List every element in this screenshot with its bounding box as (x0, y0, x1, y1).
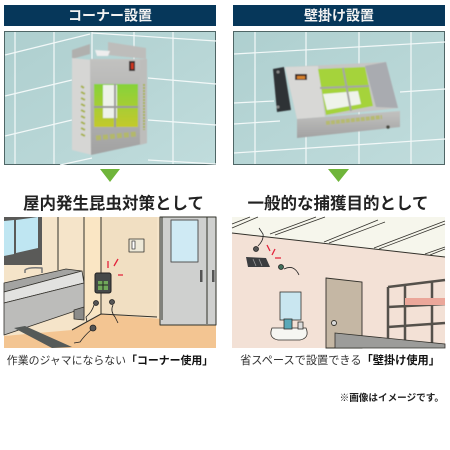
photo: device mounted in a tiled corner (4, 32, 216, 165)
door (160, 217, 216, 325)
caption: right: 省スペースで設置できる「壁掛け使用」 (240, 353, 440, 367)
heading: general capture: 一般的な捕獲目的として (247, 193, 429, 213)
illustration: kitchen corner use (4, 217, 216, 348)
header: corner installation (4, 5, 216, 26)
device: wall unit body (273, 62, 400, 138)
insects (254, 228, 299, 275)
mirror and sink (271, 292, 307, 340)
header: wall-mounted installation (233, 5, 445, 26)
floor drain (14, 326, 72, 348)
photo: device mounted flat on a tiled wall (234, 32, 445, 164)
illustration: warehouse wall use (232, 217, 445, 348)
shelves (388, 280, 445, 348)
device: corner unit body (72, 42, 147, 155)
arrow: right down (328, 169, 349, 182)
header: corner installation: コーナー設置 (68, 8, 152, 24)
flash marks (267, 245, 281, 258)
sink (4, 268, 84, 335)
door (326, 278, 362, 348)
note: image disclaimer: ※画像はイメージです。 (340, 392, 444, 404)
caption: left: 作業のジャマにならない「コーナー使用」 (7, 353, 213, 367)
heading: indoor insects: 屋内発生昆虫対策として (23, 193, 204, 213)
switch plate (129, 239, 144, 252)
window (4, 217, 42, 265)
device icon (246, 257, 270, 267)
device icon (95, 273, 111, 293)
table (335, 333, 445, 348)
flash marks (108, 259, 123, 275)
insects (74, 300, 118, 343)
header: wall-mounted installation: 壁掛け設置 (304, 8, 374, 24)
arrow: left down (100, 169, 120, 182)
